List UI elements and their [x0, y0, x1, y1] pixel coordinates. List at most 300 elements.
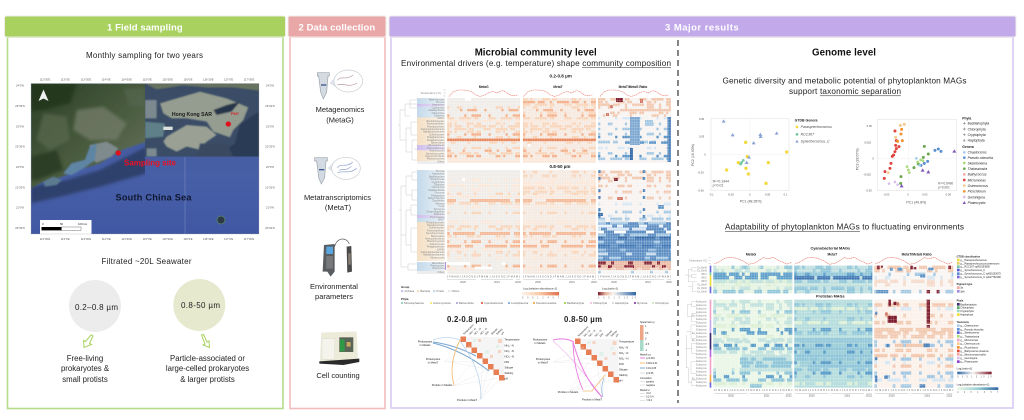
legend: phyla: Bacteroidota [459, 301, 474, 305]
PCA: cyanobacteria [691, 117, 832, 203]
map graticule labels: 24°0'N [266, 84, 274, 88]
legend: GTDB genera: Synechococcus_C [801, 140, 830, 144]
map graticule labels: 20°30'N [15, 226, 25, 230]
map graticule labels: 116°30'E [203, 237, 214, 241]
legend: phyla: Chlorophyta [593, 301, 608, 305]
legend: phyla: Nitrososphaerota [404, 301, 424, 305]
map graticule labels: 23°30'N [15, 104, 25, 108]
row labels: protists: Eukaryote [696, 346, 707, 349]
variable labels: NO₂⁻-N [504, 349, 514, 353]
row labels: bottom: Prasinophyta [431, 264, 445, 268]
subheading: 0.2-0.8 um: 0.2-0.8 µm [550, 74, 572, 78]
text: genetic diversity: support taxonomic separation [789, 87, 901, 96]
dendrogram: bottom community [399, 172, 417, 270]
top variable labels: NO₂⁻-N [588, 329, 596, 338]
row labels: cyano: Cu_BinM [697, 267, 707, 269]
month axes: 2022 [786, 394, 792, 398]
legend: GTDB classification: 3a [960, 287, 964, 290]
correlation plot: 0.8-50 um [533, 315, 635, 402]
legend: phyla: Phyla [957, 299, 964, 302]
row labels: top: Pelagibacterales [427, 136, 445, 139]
icon: cell counter [319, 331, 359, 365]
variable labels: NO₃⁻-N [619, 356, 628, 360]
row labels: protists: Eukaryote [696, 335, 707, 338]
node labels: in MetaT [538, 360, 549, 364]
row labels: protists: Eukaryote [696, 321, 707, 324]
legend: phyla: Lentisphaerota [511, 301, 529, 305]
legend: phyla: Chlorophyta [960, 307, 974, 310]
node labels: Prokaryotes [418, 340, 433, 344]
variable labels: Temperature [504, 338, 520, 342]
month axes: 2021 [764, 394, 770, 398]
row labels: top: Rhodobacterales [426, 120, 445, 123]
PCA: cyanobacteria: 0.06 [699, 117, 705, 121]
heatmap: top MetaG [447, 98, 520, 163]
map graticule labels: 21°30'N [15, 185, 25, 189]
row labels: bottom: Mamiellales [432, 262, 445, 265]
text: particle-associated: & larger protists [180, 375, 235, 384]
legend: taxonomy [957, 321, 989, 364]
legend: mantel: -0.5 [645, 343, 650, 346]
annotation strips: protists [710, 300, 711, 388]
month axes: 2020 [535, 280, 541, 284]
legend: phyla and genera: Phaeocystis [968, 201, 986, 205]
top variable labels [577, 325, 620, 338]
top variable labels: DIN [485, 330, 490, 336]
text: genetic diversity [722, 76, 966, 96]
row labels: bottom: Bacteroidota [431, 235, 445, 238]
filter: 0.2-0.8 um [69, 280, 121, 332]
row labels: bottom: Ochrophyta [432, 267, 445, 270]
legend: mantel: 0.01-0.05 [646, 367, 657, 370]
row labels: bottom: Alphaproteobacteria [423, 254, 445, 257]
row labels: top: Actinomycetia [430, 150, 445, 153]
scale bar: 50 [60, 222, 64, 226]
text: Environmental parameters [310, 282, 358, 301]
node labels: in MetaG [535, 341, 545, 345]
month axes: 2020 [728, 394, 734, 398]
subheading: environmental drivers: Environmental drivers (e.g. temperature) shape community composition [401, 59, 671, 68]
legend: phyla and genera: Bacillariophyta [968, 122, 989, 126]
legend: phyla: Myzozoa [637, 301, 648, 305]
scale bar: 100 km [78, 222, 88, 226]
header: 2 Data collection: 2 Data collection [298, 22, 376, 34]
row labels: cyano: Cu_BinM [697, 271, 707, 273]
legend: phyla and genera [962, 116, 993, 205]
legend: GTDB classification: g__Parasynechococcus [960, 259, 987, 262]
legend: GTDB classification: g__Synechococcus_C [960, 269, 985, 272]
heading: Microbial community level: Microbial community level [475, 48, 597, 58]
row labels: bottom: MAST [438, 219, 445, 222]
month axes: J F M A M J J A S O N D J F M A M J J A S O N D J F M A M J [447, 276, 520, 278]
legend: mantel: 1 [645, 325, 647, 328]
row labels: bottom: Syndiniales [432, 200, 445, 203]
month axes: 2020 [809, 394, 815, 398]
PCA: cyanobacteria: PC1 (48.35%) [740, 199, 762, 203]
text: particle-associated [166, 354, 249, 384]
top variable labels: NH₄⁺-N [582, 329, 591, 338]
top variable labels: NO₃⁻-N [594, 329, 603, 338]
PCA: phytoplankton: -0.03 [883, 192, 890, 196]
temperature curves [449, 90, 669, 96]
text: Metagenomics: Metagenomics [316, 105, 365, 114]
map graticule labels: 117°30'E [244, 77, 254, 81]
row labels: top: Katablepharida [428, 109, 445, 112]
map graticule labels: 22°30'N [15, 145, 25, 149]
heatmap: top ratio [598, 98, 671, 163]
row labels: protists [692, 300, 707, 388]
month axes: 2022 [591, 280, 597, 284]
PCA: cyanobacteria: 0.03 [699, 135, 705, 139]
row labels: top: Chlorophyta [432, 112, 445, 115]
legend: mantel: 0 [645, 338, 647, 340]
row labels: bottom: Cryptophyta [432, 181, 445, 184]
legend: phyla: Ochrophyta [655, 301, 669, 305]
month axes: 2021 [569, 280, 575, 284]
row labels: cyano [697, 267, 707, 294]
legend: mantel: 0.2-0.4 [646, 396, 654, 398]
legend: phyla [957, 299, 977, 317]
row labels: protists: Eukaryote [696, 357, 707, 360]
taxonomy bands: bottom [417, 170, 446, 274]
row labels: bottom: Prymnesiales [430, 216, 445, 219]
legend: taxonomy: g__Phaeocystis [960, 361, 979, 364]
map graticule labels: 113°0'E [61, 77, 70, 81]
PCA: phytoplankton: 0 [907, 192, 909, 196]
heatmap: bottom MetaG [447, 170, 520, 274]
row labels: bottom: Synechococcales [426, 232, 445, 235]
legend: ratio scale: Log₂(ratio+1) [602, 286, 618, 290]
map graticule labels: 113°0'E [61, 237, 70, 241]
row labels: bottom: Pelagophyta [431, 194, 445, 197]
text: Metatranscriptomics: Metatranscriptomics [304, 193, 371, 202]
row labels: bottom: Choanoflagellata [427, 210, 445, 214]
map graticule labels: 115°30'E [162, 77, 173, 81]
map graticule labels: 116°0'E [183, 237, 193, 241]
map graticule labels: 116°0'E [183, 77, 193, 81]
row labels: bottom: Gammaproteobacteria [421, 251, 445, 254]
island [217, 216, 225, 224]
filter: 0.2-0.8 um: 0.2–0.8 µm [75, 303, 118, 312]
row labels: top: Gammaproteobacteria [421, 128, 445, 131]
PCA: cyanobacteria: -0.06 [698, 189, 704, 193]
heatmap: cyano MetaT [794, 266, 872, 293]
map graticule labels: 115°0'E [143, 77, 152, 81]
temperature label [689, 258, 711, 264]
row labels: bottom: Haptophyta [432, 173, 445, 176]
row labels: bottom: Metazoa [435, 202, 445, 205]
text: free-living [61, 354, 110, 384]
icon: metagenomics tube [317, 70, 363, 99]
heading: monthly sampling: Monthly sampling for two years [86, 51, 203, 60]
row labels: bottom: Bacillariophyta [429, 175, 445, 178]
row labels: protists: Eukaryote [696, 353, 707, 356]
legend: group: Archaea [404, 289, 415, 293]
row labels: protists: Eukaryote [696, 342, 707, 345]
row labels: bottom: Myxococcota [431, 256, 445, 259]
inset: Hong Kong SAR: Hong Kong SAR [172, 112, 212, 118]
meridian line [184, 157, 186, 234]
map graticule labels: 114°30'E [121, 77, 132, 81]
legend: GTDB genera: Parasynechococcus [801, 125, 832, 129]
legend: mantel [640, 321, 658, 402]
month axes: 2022 [946, 394, 953, 398]
month axes: J F M A M J J A S O N D J F M A M J J A S O N D J F M A M J [874, 389, 953, 392]
legend: abundance scale [522, 286, 560, 300]
column titles [746, 253, 932, 257]
row labels: bottom: Puniceispirillales [427, 229, 445, 232]
top variable labels: NO₂⁻-N [474, 327, 482, 336]
row labels: protists: Eukaryote [696, 311, 707, 314]
heading: protistan MAGs: Protistan MAGs [816, 295, 845, 299]
legend: mantel: -1 [645, 349, 648, 352]
PCA: phytoplankton: -0.05 [866, 189, 872, 193]
map graticule labels: 21°0'N [16, 206, 24, 210]
node labels: Protists in MetaG [558, 390, 578, 394]
map graticule labels: 114°0'E [102, 77, 111, 81]
row labels: bottom: Chlorophyta [432, 186, 445, 189]
node labels: Prokaryotes [533, 338, 548, 342]
header: 1 Field sampling [4, 16, 286, 37]
legend: phyla: Cyanobacteriota [484, 301, 503, 305]
node labels: Protists in MetaT [582, 398, 602, 402]
row labels: bottom: Actinomycetia [430, 243, 445, 246]
legend: mantel: 0.5 [645, 332, 649, 335]
row labels: bottom: Radiolaria [434, 213, 445, 216]
heatmap: cyano ratio [874, 266, 953, 293]
map graticule labels: 21°30'N [265, 185, 275, 189]
text: Metagenomics [316, 105, 365, 124]
heatmap: bottom ratio [598, 170, 671, 274]
variable labels: NO₃⁻-N [504, 354, 514, 358]
row labels: protists: Eukaryote [696, 385, 707, 388]
legend: mantel: Spearman's ρ [640, 321, 655, 324]
legend: phyla [401, 297, 669, 305]
variable labels: DIN [619, 362, 624, 366]
row labels: cyano: Cu_BinM [697, 285, 707, 287]
top variable labels: Silicate [491, 327, 499, 336]
legend: taxonomy: g__Geminigera [960, 357, 978, 360]
heading: cyanobacterial MAGs: Cyanobacterial MAGs [811, 247, 850, 251]
variable labels: NO₂⁻-N [619, 351, 628, 355]
row labels: protists: Eukaryote [696, 325, 707, 328]
node labels: Prokaryotes [426, 357, 441, 361]
legend: ratio scale: 0 0.5 1 5 10 15 [598, 298, 637, 300]
map graticule labels: 23°30'N [265, 104, 275, 108]
row labels: top: Ciliophora [434, 114, 445, 118]
legend: mantel: Mantel's p [640, 354, 651, 356]
variable labels: Temperature [619, 340, 635, 344]
row labels: cyano: BIN2 [701, 278, 707, 280]
legend: mantel: p>0.05 [646, 372, 654, 375]
heatmap: protists MetaG [713, 300, 792, 388]
legend: taxonomy: g__Micromonas pusilla [960, 353, 986, 356]
legend: phyla and genera: Micromonas [968, 178, 986, 182]
icon: environmental meter [323, 239, 352, 277]
legend: abundance scale: Log₂(relative abundance+1) [957, 383, 989, 386]
legend: phyla and genera: Cryptophyta [968, 133, 986, 137]
PCA: phytoplankton: p=0.001 [938, 185, 950, 189]
legend: phyla: Phyla [401, 297, 409, 301]
PCA: cyanobacteria: p=0.01 [713, 184, 723, 188]
row labels: protists: Eukaryote [696, 364, 707, 367]
legend: ratio scale [598, 286, 637, 300]
row labels: protists: Eu_Eukaryote [692, 332, 707, 335]
PCA: cyanobacteria: PC2 (16.93%) [691, 144, 695, 166]
map graticule labels: 115°30'E [162, 237, 173, 241]
row labels: bottom: Dinophyceae [431, 178, 445, 181]
legend: GTDB classification: 3dA [960, 290, 965, 293]
variable labels: Silicate [619, 368, 628, 372]
month axes: 2021 [494, 280, 500, 284]
variable labels [619, 340, 635, 382]
variable labels: Silicate [504, 366, 514, 370]
row labels: protists: Eukaryote [696, 367, 707, 370]
map graticule labels: 117°0'E [224, 237, 233, 241]
row labels: top: Cryptophyta [432, 106, 445, 109]
column titles: MetaT [553, 85, 563, 89]
heatmap: cyano MetaG [713, 266, 792, 293]
text: Cell counting: Cell counting [316, 371, 360, 380]
legend: taxonomy: g__Pseudo-nitzschia [960, 328, 984, 331]
panel: 3 Major results [389, 16, 1016, 408]
taxonomy bands: top [417, 98, 445, 164]
text: particle-associated: Particle-associated or [170, 354, 245, 363]
legend: phyla: Bacillariophyta [567, 301, 584, 305]
arrow: free-living [84, 335, 93, 348]
legend: group: Protist [436, 289, 444, 293]
annotation strips: cyano [710, 266, 711, 293]
sampling site marker [116, 150, 176, 168]
row labels: bottom: Ciliophora [434, 184, 445, 186]
row labels: top: Thermoplasmata [427, 147, 445, 150]
map graticule labels: 22°30'N [265, 145, 275, 149]
text: Metagenomics: (MetaG) [326, 116, 354, 124]
legend: group: Others [452, 289, 460, 293]
legend: phyla and genera: Picochlorum [968, 190, 986, 194]
dendrogram: top community [398, 100, 417, 160]
legend: taxonomy: g__Chaetoceros [960, 325, 979, 328]
legend: mantel: negative [646, 384, 656, 387]
column titles: MetaT/MetaG Ratio [902, 253, 932, 257]
legend: abundance scale: Log₂(relative abundance+1) [523, 286, 557, 290]
month axes [713, 389, 953, 398]
month axes: 2022 [666, 280, 672, 284]
map graticule labels: 117°30'E [244, 237, 254, 241]
top variable labels: Salinity [496, 327, 504, 336]
row labels: bottom: Katablepharida [428, 189, 445, 192]
text: Environmental parameters: Environmental [310, 282, 358, 291]
variable labels: DIN [504, 360, 509, 364]
PCA: cyanobacteria: 0 [749, 192, 751, 196]
row labels: protists: Eukaryote [696, 304, 707, 307]
legend: ratio scale [957, 368, 992, 379]
arrow: particle-associated [202, 334, 210, 348]
map graticule labels: 112°30'E [40, 237, 50, 241]
PCA: phytoplankton: 0.03 [922, 192, 928, 196]
row labels: bottom: Flavobacteriales [427, 224, 445, 227]
header: 2 Data collection [288, 16, 386, 37]
top variable labels: NH₄⁺-N [468, 327, 477, 336]
PCA: phytoplankton: 0 [872, 157, 874, 161]
inset: Hong Kong SAR [145, 83, 259, 157]
row labels: bottom: Cellvibrionales [429, 227, 445, 230]
dendrogram: cyano [685, 268, 697, 292]
map graticule labels: 23°0'N [16, 124, 24, 128]
legend: phyla: Haptophyta [960, 314, 974, 317]
row labels: bottom: Rhodobacterales [426, 221, 445, 224]
legend: phyla and genera: Chaetoceros [968, 150, 987, 154]
row labels: protists: Eu_Eukaryote [692, 378, 707, 381]
text: free-living: Free-living [67, 354, 103, 363]
row labels: protists: Eu_Eukaryote [692, 314, 707, 317]
legend: group: Bacteria [420, 289, 431, 293]
temperature label [420, 90, 446, 96]
month axes: 2021 [924, 394, 931, 398]
filter: 0.8-50 um: 0.8-50 µm [181, 301, 220, 310]
node labels: Protists in MetaT [457, 398, 477, 402]
legend: GTDB classification: g__Parasynechococcus praenorum [960, 262, 999, 265]
PCA: cyanobacteria: -0.03 [698, 171, 704, 175]
month axes: J F M A M J J A S O N D J F M A M J J A S O N D J F M A M J [523, 276, 596, 278]
legend: GTDB genera: RCC307 [801, 132, 815, 136]
mantel links [433, 338, 499, 400]
PCA: phytoplankton: PC1 (49.8%) [906, 200, 926, 204]
legend: phyla and genera: Haptophyta [968, 138, 985, 142]
row labels: bottom [421, 170, 445, 274]
map graticule labels: 22°0'N [16, 165, 24, 169]
node labels [418, 340, 477, 402]
node labels: in MetaG [420, 343, 430, 347]
legend: phyla and genera: Phyla [962, 116, 971, 120]
text: free-living: prokaryotes & [61, 364, 110, 373]
top variable labels: DIN [599, 332, 604, 338]
row labels: cyano: Cu_BinM [697, 288, 707, 290]
variable labels: NH₄⁺-N [504, 344, 514, 348]
panel: 2 Data collection [288, 16, 386, 408]
top variable labels: pH [615, 333, 620, 338]
variable labels: pH [504, 376, 508, 380]
dashed divider [677, 40, 679, 403]
temperature curves [714, 257, 953, 264]
month axes [447, 276, 672, 284]
legend: phyla and genera: Thalassiosira [968, 167, 987, 171]
row labels: protists: Eukaryote [696, 307, 707, 310]
legend: GTDB genera [795, 118, 832, 144]
legend: GTDB classification: GTDB classification [957, 255, 981, 258]
row labels: top [421, 98, 445, 163]
legend: mantel: 0.001-0.01 [646, 362, 658, 365]
row labels: top: Picozoa [436, 101, 445, 104]
legend: phyla and genera: Ostreococcus [968, 184, 988, 188]
text: adaptability: Adaptability of phytoplankton MAGs to fluctuating environments [725, 222, 964, 232]
row labels: protists: Eukaryote [696, 350, 707, 353]
legend: taxonomy: g__Skeletonema [960, 332, 980, 335]
row labels: top: Synechococcales [426, 152, 445, 155]
header: 3 Major results [389, 16, 1016, 37]
PCA: cyanobacteria: 0 [704, 153, 706, 157]
PCA: phytoplankton [856, 116, 993, 205]
legend: abundance scale: 0 0.5 1 3 5 7 [957, 392, 999, 394]
row labels: cyano: Cu_BinM [697, 292, 707, 294]
row labels: protists: Eu_Eukaryote [692, 339, 707, 342]
map graticule labels: 114°0'E [102, 237, 111, 241]
dendrogram: protists [686, 302, 697, 386]
row labels: top: Nitrososphaeria [428, 144, 445, 147]
row labels: top: Verrucomicrobiota [425, 155, 445, 158]
variable labels: Salinity [619, 373, 628, 377]
row labels: bottom: Others [437, 271, 445, 274]
